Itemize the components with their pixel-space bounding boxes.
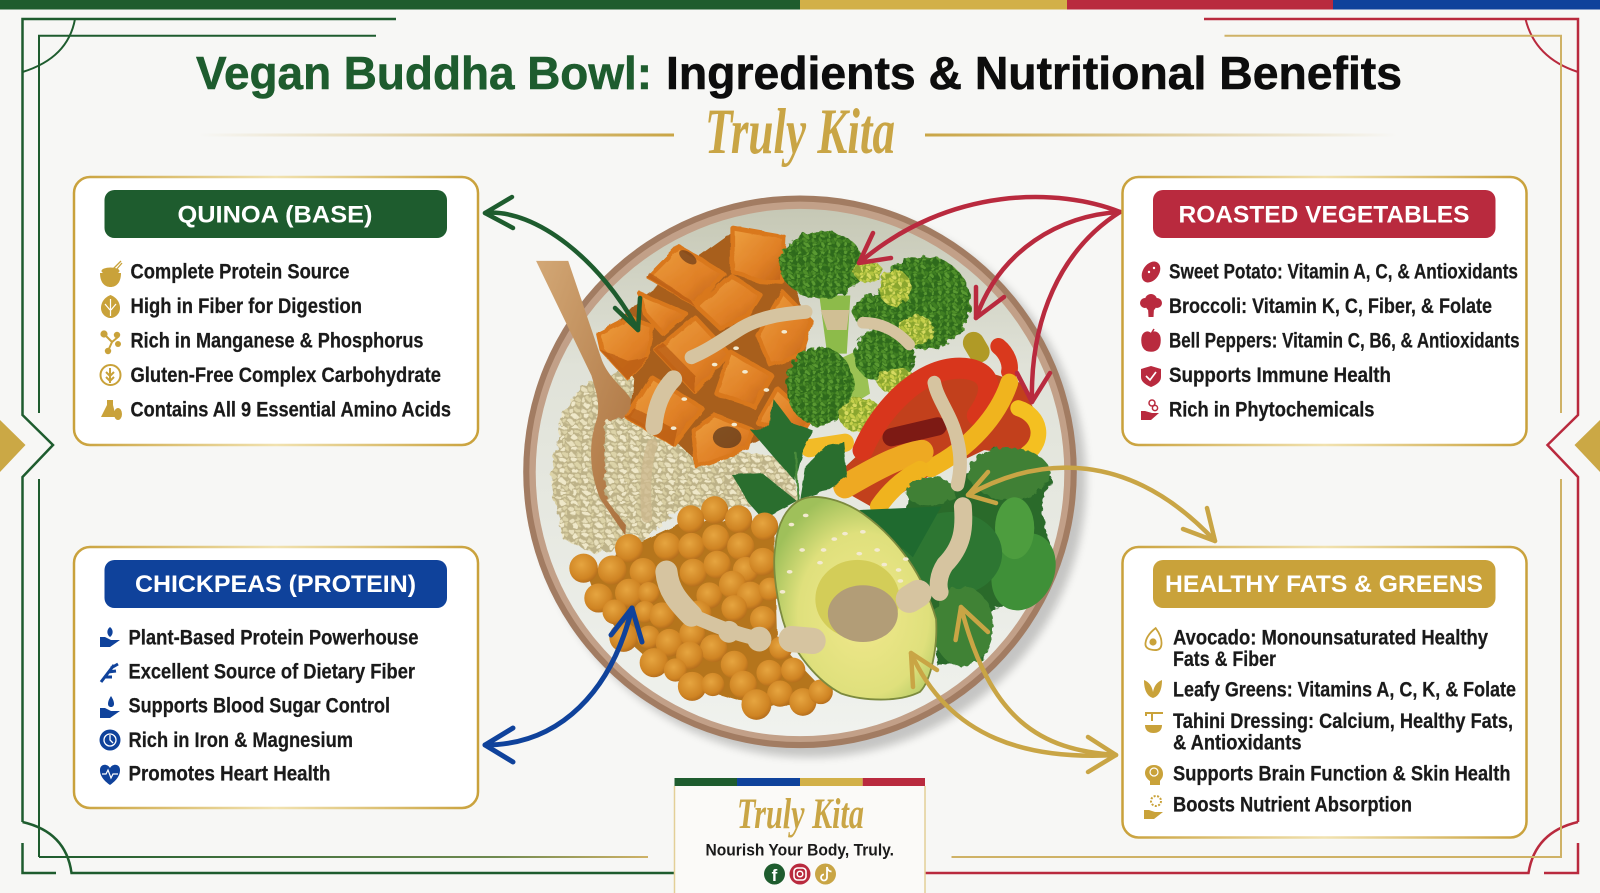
panel: quinoa: [74, 177, 478, 445]
list: fats and greens benefits: Leafy Greens: Vitamins A, C, K, & Folate: [1173, 678, 1516, 702]
list: vegetables benefits: Rich in Phytochemicals: [1169, 398, 1374, 422]
panel: healthy fats and greens: [1122, 547, 1526, 838]
social icons: f: [772, 866, 778, 885]
arrows: roasted vegetables: [859, 197, 1120, 402]
brand subtitle with rules: [199, 96, 1397, 168]
heading: roasted vegetables: [1153, 190, 1496, 238]
footer colour bar: [674, 778, 925, 786]
list: fats and greens benefits: Avocado: Monounsaturated Healthy: [1173, 626, 1488, 650]
heading: healthy fats and greens: HEALTHY FATS & GREENS: [1165, 571, 1483, 598]
arrows: healthy fats and greens: [911, 468, 1215, 772]
list: fats and greens benefits: & Antioxidants: [1173, 732, 1302, 754]
tahini drizzle: [646, 312, 963, 651]
title: [196, 47, 1402, 99]
footer tagline: Nourish Your Body, Truly.: [706, 842, 894, 860]
list: vegetables benefits: Sweet Potato: Vitamin A, C, & Antioxidants: [1169, 260, 1518, 284]
decorative frame: left: [22, 19, 674, 873]
sesame seeds: [671, 330, 909, 594]
list: fats and greens benefits: [1173, 626, 1516, 816]
list: quinoa benefits: [130, 260, 451, 422]
list: vegetables benefits: Supports Immune Health: [1169, 364, 1391, 387]
heading: quinoa: QUINOA (BASE): [178, 202, 372, 228]
icons: fats and greens: [1144, 627, 1164, 819]
list: vegetables benefits: Broccoli: Vitamin K, C, Fiber, & Folate: [1169, 295, 1492, 318]
list: chickpeas benefits: Rich in Iron & Magnesium: [128, 729, 353, 752]
panel: chickpeas: [74, 547, 478, 808]
heading: chickpeas: CHICKPEAS (PROTEIN): [135, 571, 416, 598]
roasted peppers: [838, 365, 1043, 510]
list: fats and greens benefits: Tahini Dressing: Calcium, Healthy Fats,: [1173, 710, 1513, 733]
list: chickpeas benefits: Excellent Source of Dietary Fiber: [128, 660, 415, 684]
chickpeas: [588, 521, 824, 706]
side diamond left: [0, 420, 26, 472]
list: quinoa benefits: Complete Protein Source: [130, 260, 350, 284]
sweet potato cubes: [599, 228, 811, 466]
list: fats and greens benefits: Supports Brain Function & Skin Health: [1173, 762, 1510, 786]
arrow: quinoa: [485, 197, 640, 330]
wooden spoon: [536, 261, 632, 535]
top colour bar: [0, 0, 1600, 10]
list: vegetables benefits: Bell Peppers: Vitamin C, B6, & Antioxidants: [1169, 330, 1520, 352]
list: chickpeas benefits: Supports Blood Sugar Control: [128, 694, 390, 718]
list: fats and greens benefits: Boosts Nutrient Absorption: [1173, 794, 1412, 816]
list: quinoa benefits: Rich in Manganese & Phosphorus: [130, 330, 424, 352]
list: quinoa benefits: High in Fiber for Digestion: [130, 295, 362, 318]
footer logo: Truly Kita: [737, 791, 864, 838]
list: quinoa benefits: Gluten-Free Complex Carbohydrate: [130, 364, 441, 387]
avocado half: [774, 497, 936, 700]
footer brand box: [674, 778, 925, 893]
list: fats and greens benefits: Fats & Fiber: [1173, 648, 1276, 671]
side diamond right: [1574, 420, 1600, 472]
icons: chickpeas: [100, 627, 120, 785]
parsley: [732, 399, 847, 519]
heading: quinoa: [104, 190, 447, 238]
leafy greens: [859, 448, 1068, 666]
icons: quinoa: [100, 261, 122, 420]
list: chickpeas benefits: Promotes Heart Health: [128, 762, 330, 786]
list: chickpeas benefits: [128, 626, 418, 786]
quinoa: [550, 365, 799, 554]
broccoli: [819, 295, 850, 354]
central bowl illustration: [523, 195, 1086, 757]
heading: healthy fats and greens: [1153, 560, 1496, 608]
heading: chickpeas: [104, 560, 447, 608]
list: quinoa benefits: Contains All 9 Essential Amino Acids: [130, 398, 451, 422]
panel: roasted vegetables: [1122, 177, 1526, 445]
brand subtitle with rules: Truly Kita: [705, 96, 895, 168]
decorative frame: right: [925, 19, 1578, 873]
list: chickpeas benefits: Plant-Based Protein Powerhouse: [128, 626, 418, 650]
title: Ingredients & Nutritional Benefits: [666, 47, 1402, 99]
icons: vegetables: [1138, 258, 1164, 420]
list: vegetables benefits: [1169, 260, 1520, 422]
social icons: [764, 864, 836, 885]
heading: roasted vegetables: ROASTED VEGETABLES: [1178, 202, 1470, 228]
arrow: chickpeas: [485, 608, 642, 762]
title: Vegan Buddha Bowl:: [196, 47, 652, 99]
